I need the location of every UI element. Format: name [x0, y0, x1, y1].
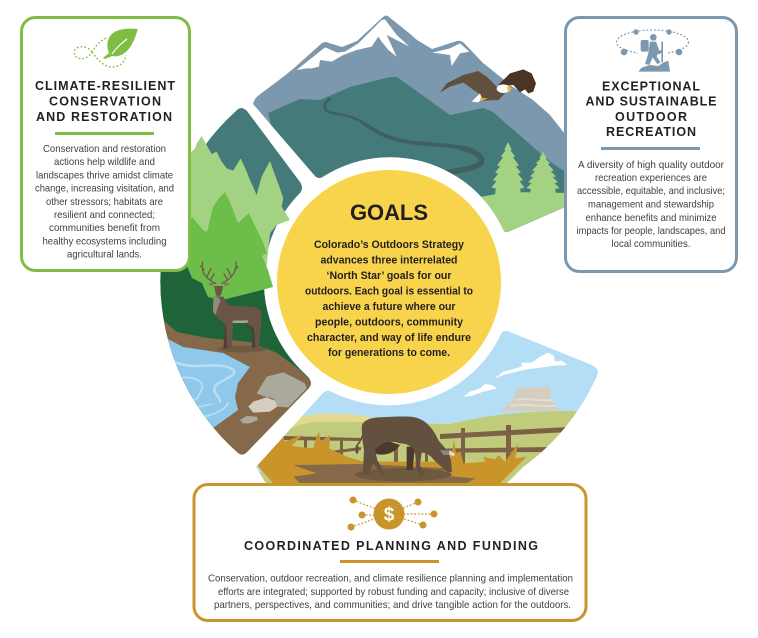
body text [208, 574, 573, 611]
snow caps [297, 19, 469, 70]
body text: resilient and connected; [54, 210, 155, 221]
heading: CONSERVATION [49, 94, 161, 108]
icon: eagle [440, 69, 536, 102]
body text: other stressors; habitats are [46, 197, 163, 208]
mid green trees [180, 192, 273, 300]
heading: COORDINATED PLANNING AND FUNDING [244, 539, 538, 553]
heading: EXCEPTIONAL [602, 80, 700, 94]
body text: healthy ecosystems including [42, 236, 167, 248]
heading: AND RESTORATION [36, 110, 172, 124]
icon: deer [201, 262, 267, 352]
text: goals description [305, 239, 473, 359]
body text: recreation experiences are [595, 173, 707, 184]
fence [283, 425, 566, 464]
text: goals description: character, and way of life endure [307, 332, 471, 344]
text: goals description: Colorado’s Outdoors Strategy [314, 239, 465, 251]
winding trail [325, 99, 482, 173]
text: goals description: for generations to come. [328, 347, 450, 359]
heading: AND SUSTAINABLE [586, 94, 716, 108]
body text: actions help wildlife and [54, 157, 155, 168]
body text: Conservation, outdoor recreation, and climate resilience planning and implementation [208, 574, 573, 584]
body text: change, increasing visitation, and [35, 184, 174, 194]
heading: goals: GOALS [350, 200, 428, 225]
body text [35, 144, 174, 260]
panel: climate-resilient conservation and restoration [22, 18, 190, 270]
body text: partners, perspectives, and communities; and drive tangible action for the outdoors. [214, 600, 571, 611]
golden grass [257, 430, 527, 483]
text: goals description: advances three interrelated [320, 254, 458, 266]
body text: local communities. [612, 239, 690, 250]
icon: hiker with dotted orbit [616, 29, 688, 72]
illustration: mountain and eagle section [253, 16, 564, 232]
clouds [463, 353, 568, 397]
heading: CLIMATE-RESILIENT [35, 79, 175, 93]
heading: RECREATION [606, 125, 696, 139]
illustration: forest, deer and stream section [160, 108, 311, 454]
body text: enhance benefits and minimize [586, 213, 717, 224]
icon: dollar hub [348, 496, 438, 530]
rocks [240, 372, 307, 423]
heading: OUTDOOR [615, 110, 687, 124]
icon: cow [355, 417, 455, 481]
body text [576, 160, 726, 250]
icon: dollar hub: $ [384, 504, 395, 526]
heading [586, 80, 716, 139]
body text: A diversity of high quality outdoor [578, 160, 725, 171]
hills [285, 414, 458, 435]
right meadow and trees [481, 192, 564, 232]
body text: communities benefit from [49, 223, 160, 234]
text: goals description: achieve a future where our [322, 301, 456, 313]
heading [35, 79, 175, 124]
text: goals description: ‘North Star’ goals for our [326, 270, 452, 282]
center circle: goals [277, 170, 501, 394]
text: goals description: people, outdoors, community [315, 316, 464, 328]
body text: management and stewardship [588, 200, 714, 210]
body text: efforts are integrated; supported by robust funding and capacity; inclusive of diverse [218, 587, 569, 598]
body text: accessible, equitable, and inclusive; [577, 186, 725, 197]
text: goals description: outdoors. Each goal is essential to [305, 286, 473, 298]
light green trees [187, 136, 290, 267]
body text: landscapes thrive amidst climate [36, 170, 173, 182]
mesa [501, 387, 560, 411]
icon: leaf with dotted infinity loop [74, 29, 138, 67]
body text: Conservation and restoration [43, 144, 166, 155]
body text: agricultural lands. [67, 250, 142, 260]
body text: impacts for people, landscapes, and [576, 226, 726, 237]
panel: exceptional and sustainable outdoor recreation [566, 18, 736, 272]
panel: coordinated planning and funding [194, 484, 586, 620]
illustration: ranch and cow section [256, 331, 598, 483]
